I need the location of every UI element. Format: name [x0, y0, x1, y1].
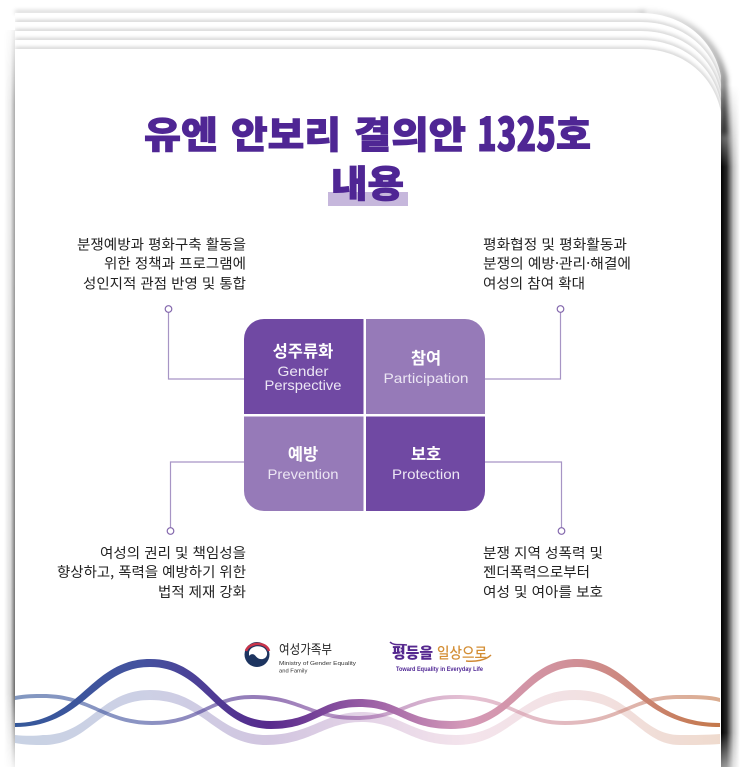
text block: prevention: 여성의 권리 및 책임성을 — [100, 543, 246, 563]
text block: participation: 평화협정 및 평화활동과 — [483, 234, 627, 254]
text block: prevention: 향상하고, 폭력을 예방하기 위한 — [57, 562, 246, 582]
cell: gender perspective — [244, 319, 364, 414]
strong main wave — [15, 659, 720, 729]
title: 유엔 — [144, 105, 218, 159]
title: 1325 — [477, 99, 556, 165]
title highlight — [328, 192, 408, 206]
connector: protection — [485, 462, 565, 534]
icon: taegeuk emblem — [244, 642, 270, 667]
logo: equality in everyday life: Toward Equality in Everyday Life — [396, 667, 484, 673]
logo: equality in everyday life: 일상으로 — [437, 642, 487, 663]
cell: protection: Protection — [392, 466, 460, 482]
connector: participation — [485, 306, 564, 379]
text block: participation — [483, 234, 631, 294]
title: 내용 — [331, 154, 404, 208]
cell: prevention: Prevention — [268, 466, 338, 482]
logo: equality in everyday life: 평등을 — [392, 642, 433, 663]
connector: prevention — [167, 462, 244, 534]
logo: ministry of gender equality and family — [244, 639, 356, 674]
decorative waves — [15, 659, 720, 745]
text block: protection: 여성 및 여아를 보호 — [483, 582, 603, 602]
title — [144, 99, 591, 208]
cell: gender perspective: Perspective — [264, 377, 342, 393]
cell: protection — [366, 416, 485, 511]
text block: gender perspective: 분쟁예방과 평화구축 활동을 — [77, 234, 246, 254]
cell: participation: 참여 — [411, 345, 441, 369]
text block: protection: 젠더폭력으로부터 — [483, 562, 590, 582]
title: 호 — [556, 105, 591, 159]
cell: prevention: 예방 — [288, 441, 318, 465]
four pillars matrix — [244, 319, 485, 511]
title: 결의안 — [354, 105, 466, 159]
text block: gender perspective: 성인지적 관점 반영 및 통합 — [83, 274, 246, 294]
logo: ministry of gender equality and family: Ministry of Gender Equality — [279, 661, 356, 667]
logo: ministry of gender equality and family: 여성가족부 — [279, 639, 332, 658]
text block: protection — [483, 543, 603, 602]
text block: prevention — [57, 543, 246, 602]
text block: prevention: 법적 제재 강화 — [158, 582, 246, 602]
text block: gender perspective: 위한 정책과 프로그램에 — [104, 254, 246, 274]
text block: participation: 분쟁의 예방·관리·해결에 — [483, 254, 631, 274]
stacked paper sheets — [15, 13, 724, 138]
medium thin wave — [15, 694, 720, 725]
text block: gender perspective — [77, 234, 246, 294]
cell: prevention — [244, 416, 364, 511]
text block: protection: 분쟁 지역 성폭력 및 — [483, 543, 603, 563]
cell: gender perspective: Gender — [278, 363, 329, 379]
cell: participation — [366, 319, 485, 414]
cell: protection: 보호 — [411, 441, 441, 465]
logo: ministry of gender equality and family: and Family — [279, 668, 307, 674]
cell: participation: Participation — [384, 370, 468, 386]
text block: participation: 여성의 참여 확대 — [483, 274, 585, 294]
connector: gender perspective — [165, 306, 244, 379]
cell: gender perspective: 성주류화 — [273, 338, 333, 362]
pale wide wave — [15, 690, 720, 745]
logo: equality in everyday life — [390, 642, 491, 673]
title: 안보리 — [231, 105, 341, 159]
